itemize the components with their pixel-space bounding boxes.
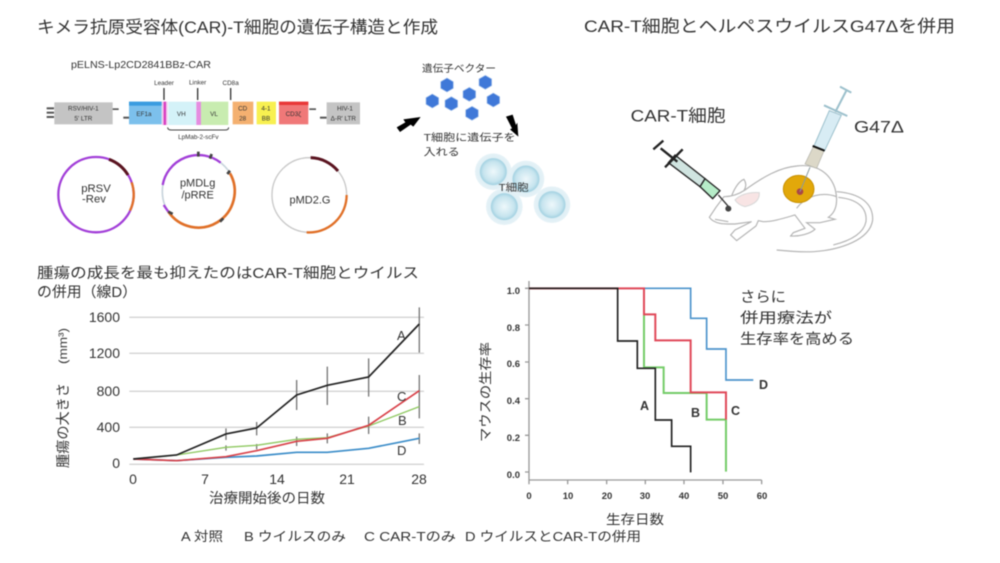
x axis labels: 10 — [563, 491, 573, 502]
syringe: CAR-T — [653, 141, 731, 212]
chart: survival curve — [478, 281, 854, 527]
plasmid: pMD2.G: pMD2.G — [290, 194, 330, 206]
curve labels: C — [731, 404, 740, 418]
y axis title: 腫瘍の大きさ — [55, 383, 71, 468]
x axis labels: 7 — [201, 471, 209, 487]
y axis labels: 1.0 — [507, 286, 520, 297]
legend: C CAR-Tのみ — [364, 529, 456, 544]
x axis title: 治療開始後の日数 — [209, 490, 325, 506]
line labels: C — [397, 389, 406, 404]
x axis labels: 50 — [718, 491, 728, 502]
x axis labels: 20 — [602, 491, 612, 502]
arrow: right — [506, 115, 518, 137]
label: T cell: T細胞 — [499, 181, 529, 194]
label: G47 delta: G47Δ — [854, 117, 904, 136]
heading: tumor growth: 腫瘍の成長を最も抑えたのはCAR-T細胞とウイルス — [37, 264, 419, 282]
y axis labels: 0.0 — [507, 470, 520, 481]
plot lines — [129, 307, 424, 464]
construct bar: 28 — [239, 116, 247, 123]
curve D — [529, 288, 753, 380]
plasmid: pRSV-Rev: -Rev — [82, 194, 106, 206]
heading: tumor growth — [37, 264, 419, 301]
y axis labels: 0.6 — [507, 359, 520, 370]
construct bar — [47, 79, 360, 141]
construct bar: 5' LTR — [74, 116, 93, 123]
curve A — [529, 288, 691, 472]
construct bar: BB — [262, 116, 270, 123]
construct bar: Leader — [154, 80, 174, 87]
y axis labels — [89, 309, 120, 471]
legend: D ウイルスとCAR-Tの併用 — [465, 529, 641, 544]
x axis labels: 0 — [526, 491, 532, 502]
x axis labels: 60 — [757, 491, 767, 502]
mouse — [709, 166, 873, 252]
plasmid: pMDLg/pRRE: pMDLg — [180, 178, 215, 190]
curve labels — [640, 378, 768, 420]
curve B — [644, 315, 726, 472]
x axis labels: 28 — [411, 471, 427, 487]
label: gene vector: 遺伝子ベクター — [422, 62, 496, 75]
plasmid: pMDLg/pRRE: /pRRE — [181, 190, 214, 202]
plasmid: pMDLg/pRRE — [162, 152, 235, 228]
annotation: さらに — [740, 289, 786, 306]
x axis labels: 40 — [679, 491, 689, 502]
label: insert gene: T細胞に遺伝子を — [424, 131, 516, 144]
x axis labels: 14 — [269, 471, 285, 487]
line labels — [397, 328, 407, 458]
construct bar: CD3ζ — [286, 111, 301, 118]
panel: gene construct diagram — [47, 60, 360, 232]
construct bar: CD8a — [223, 80, 239, 87]
title: right: CAR-T細胞とヘルペスウイルスG47Δを併用 — [584, 17, 955, 36]
title: left: キメラ抗原受容体(CAR)-T細胞の遺伝子構造と作成 — [37, 18, 438, 37]
y axis title: マウスの生存率 — [478, 342, 493, 442]
panel: mouse injection — [631, 87, 904, 252]
tumor — [783, 175, 814, 203]
annotation: 生存率を高める — [740, 331, 854, 348]
y axis labels: 1600 — [89, 309, 120, 325]
x axis labels: 21 — [339, 471, 355, 487]
line labels: D — [397, 443, 406, 458]
construct bar: LpMab-2-scFv — [178, 134, 219, 141]
x axis labels: 0 — [129, 471, 137, 487]
curve labels: B — [691, 406, 700, 420]
curve C — [529, 288, 726, 420]
plasmid: pRSV-Rev — [58, 157, 134, 232]
vector hexagons — [426, 75, 500, 120]
x axis labels: 30 — [640, 491, 650, 502]
syringe: G47 delta — [800, 87, 851, 192]
arrow: left — [397, 117, 421, 132]
y axis labels: 400 — [97, 419, 120, 435]
y axis labels: 0.4 — [507, 396, 521, 407]
mouse ear — [735, 193, 759, 207]
x axis labels — [129, 471, 427, 487]
annotation: 併用療法が — [740, 310, 833, 327]
panel: gene transfer: 入れる — [424, 147, 460, 159]
heading: tumor growth: の併用（線D） — [37, 284, 137, 301]
panel: gene transfer — [397, 62, 570, 225]
annotation — [740, 289, 854, 348]
construct bar: HIV-1 — [337, 106, 353, 113]
construct bar: VL — [210, 111, 218, 118]
legend — [181, 529, 641, 544]
axes — [525, 281, 762, 484]
construct label: pELNS-Lp2CD2841BBz-CAR — [71, 60, 211, 71]
curve labels: A — [640, 399, 649, 413]
y axis labels: 0.2 — [507, 433, 520, 444]
x axis title: 生存日数 — [606, 512, 664, 527]
line labels: A — [397, 328, 406, 343]
construct bar: CD — [238, 106, 248, 113]
legend: B ウイルスのみ — [244, 529, 346, 544]
y axis labels — [507, 286, 521, 481]
y axis unit: (mm³) — [56, 328, 70, 364]
plasmid: pRSV-Rev: pRSV — [81, 183, 111, 195]
label: CAR-T cell: CAR-T細胞 — [631, 107, 726, 126]
x axis labels — [526, 491, 767, 502]
construct bar: Δ-R' LTR — [331, 116, 356, 123]
construct bar: RSV/HIV-1 — [68, 106, 99, 113]
y axis labels: 0 — [112, 455, 120, 471]
chart: tumor size line chart — [55, 307, 427, 506]
construct bar: VH — [177, 111, 186, 118]
T cells — [475, 153, 570, 225]
y axis labels: 0.8 — [507, 323, 520, 334]
construct bar: Linker — [189, 79, 206, 86]
y axis labels: 800 — [97, 383, 120, 399]
y axis labels: 1200 — [89, 345, 120, 361]
construct bar: EF1a — [136, 111, 152, 118]
curve labels: D — [759, 378, 768, 392]
legend: A 対照 — [181, 529, 223, 544]
plasmid: pMD2.G — [272, 158, 347, 232]
line labels: B — [398, 413, 407, 428]
construct bar: 4-1 — [261, 106, 271, 113]
